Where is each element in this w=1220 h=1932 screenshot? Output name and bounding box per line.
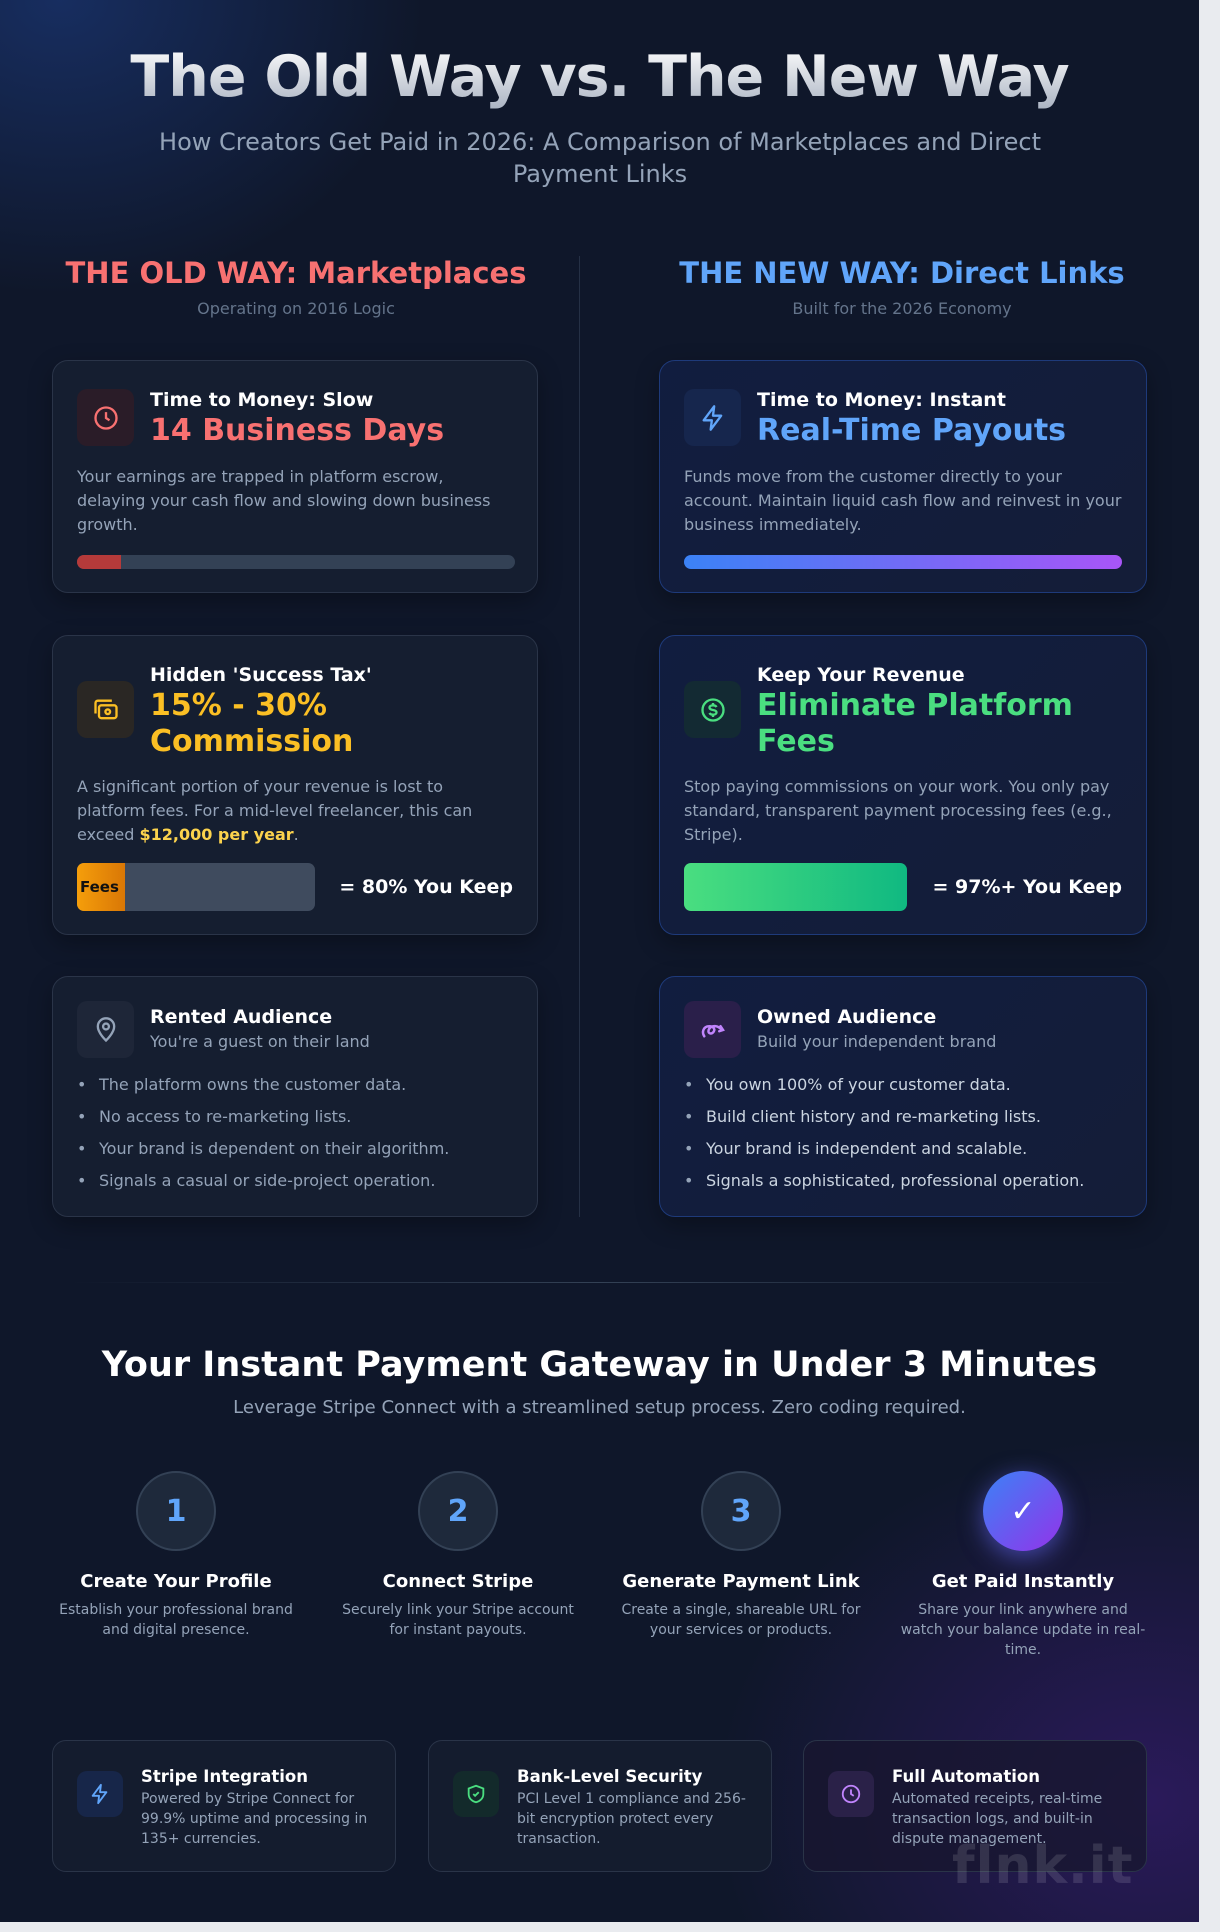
fees bar: Fees <box>80 878 119 896</box>
step 3: Create a single, shareable URL for your services or products. <box>621 1602 861 1638</box>
icon: clock <box>828 1771 874 1817</box>
step 1: 1 <box>166 1494 186 1528</box>
feature: stripe <box>52 1740 396 1872</box>
feature: security: PCI Level 1 compliance and 256-bit encryption protect every transaction. <box>517 1791 746 1847</box>
card: old fees <box>52 635 538 935</box>
feature: security: Bank-Level Security <box>517 1767 702 1786</box>
card: owned audience: Build your independent brand <box>757 1032 996 1051</box>
card: rented audience: Rented Audience <box>150 1006 332 1028</box>
card: new fees <box>659 635 1147 935</box>
bullet list: The platform owns the customer data. <box>99 1075 406 1094</box>
step 4: Get Paid Instantly <box>932 1571 1114 1592</box>
feature: automation: Automated receipts, real-time transaction logs, and built-in dispute management. <box>892 1791 1102 1847</box>
card: old fees: A significant portion of your revenue is lost to platform fees. For a mid-level freelancer, this can exceed $12,000 per year. <box>77 777 472 844</box>
step 2: Securely link your Stripe account for instant payouts. <box>342 1602 574 1638</box>
step 3 <box>621 1471 861 1638</box>
step 4: ✓ <box>1010 1494 1036 1528</box>
card: old fees: = 80% You Keep <box>339 876 513 898</box>
card: rented audience <box>52 976 538 1217</box>
icon: lightning <box>77 1771 123 1817</box>
heading: old way: Operating on 2016 Logic <box>197 299 395 318</box>
step 1 <box>59 1471 293 1638</box>
card: old time to money <box>52 360 538 593</box>
card: rented audience: You're a guest on their land <box>150 1032 370 1051</box>
keep bar <box>684 863 907 911</box>
card: owned audience: Owned Audience <box>757 1006 936 1028</box>
fees bar <box>77 863 315 911</box>
card: old fees: Commission <box>150 724 353 759</box>
step 1: Establish your professional brand and digital presence. <box>59 1602 293 1638</box>
icon: shield <box>453 1771 499 1817</box>
title: The Old Way vs. The New Way <box>130 44 1069 110</box>
bullet list: Build client history and re-marketing lists. <box>706 1107 1041 1126</box>
feature: stripe: Powered by Stripe Connect for 99.9% uptime and processing in 135+ currencies. <box>141 1791 367 1847</box>
subtitle: How Creators Get Paid in 2026: A Comparison of Marketplaces and Direct Payment Links <box>159 128 1041 188</box>
card: new fees: Stop paying commissions on your work. You only pay standard, transparent payment processing fees (e.g., Stripe). <box>684 777 1112 844</box>
bullet list: No access to re-marketing lists. <box>99 1107 351 1126</box>
step 3: 3 <box>731 1494 751 1528</box>
feature: security <box>428 1740 772 1872</box>
bullet list: Your brand is dependent on their algorithm. <box>99 1139 449 1158</box>
bullet list: Your brand is independent and scalable. <box>706 1139 1027 1158</box>
icon: lightning <box>684 389 741 446</box>
step 4: Share your link anywhere and watch your balance update in real-time. <box>901 1602 1145 1658</box>
icon: loop <box>684 1001 741 1058</box>
feature: automation: Full Automation <box>892 1767 1040 1786</box>
heading: new way <box>679 256 1125 318</box>
card: old fees: 15% - 30% <box>150 688 327 723</box>
heading: new way: Built for the 2026 Economy <box>792 299 1012 318</box>
heading: old way <box>66 256 526 318</box>
step 2 <box>342 1471 574 1638</box>
card: new time to money: Time to Money: Instant <box>757 389 1006 411</box>
card: old time to money: 14 Business Days <box>150 413 444 448</box>
card: new fees: Fees <box>757 724 835 759</box>
bullet list: Signals a sophisticated, professional operation. <box>706 1171 1084 1190</box>
card: new fees: Keep Your Revenue <box>757 664 965 686</box>
feature: automation <box>803 1740 1147 1872</box>
card: new time to money: Real-Time Payouts <box>757 413 1066 448</box>
progress bar: slow <box>77 555 515 569</box>
step 2: 2 <box>448 1494 468 1528</box>
bullet list: Signals a casual or side-project operation. <box>99 1171 435 1190</box>
step 2: Connect Stripe <box>383 1571 533 1592</box>
progress bar: instant <box>684 555 1122 569</box>
card: old time to money: Your earnings are trapped in platform escrow, delaying your cash flow and slowing down business growth. <box>77 467 490 534</box>
card: new time to money <box>659 360 1147 593</box>
bullet list: You own 100% of your customer data. <box>706 1075 1011 1094</box>
card: owned audience <box>659 976 1147 1217</box>
icon: money <box>77 681 134 738</box>
icon: clock <box>77 389 134 446</box>
card: old time to money: Time to Money: Slow <box>150 389 373 411</box>
heading: new way: THE NEW WAY: Direct Links <box>679 256 1125 290</box>
section title: Your Instant Payment Gateway in Under 3 Minutes <box>102 1345 1097 1385</box>
heading: old way: THE OLD WAY: Marketplaces <box>66 256 526 290</box>
step 1: Create Your Profile <box>80 1571 272 1592</box>
watermark: flnk.it <box>952 1836 1133 1896</box>
bullet list <box>79 1075 449 1190</box>
card: new fees: Eliminate Platform <box>757 688 1073 723</box>
section subtitle: Leverage Stripe Connect with a streamlined setup process. Zero coding required. <box>233 1397 966 1418</box>
step 4 <box>901 1462 1145 1658</box>
icon: pin <box>77 1001 134 1058</box>
step 3: Generate Payment Link <box>622 1571 860 1592</box>
card: new time to money: Funds move from the customer directly to your account. Maintain liquid cash flow and reinvest in your business immediately. <box>684 467 1121 534</box>
bullet list <box>686 1075 1084 1190</box>
card: new fees: = 97%+ You Keep <box>932 876 1122 898</box>
icon: dollar <box>684 681 741 738</box>
card: old fees: Hidden 'Success Tax' <box>150 664 372 686</box>
feature: stripe: Stripe Integration <box>141 1767 308 1786</box>
